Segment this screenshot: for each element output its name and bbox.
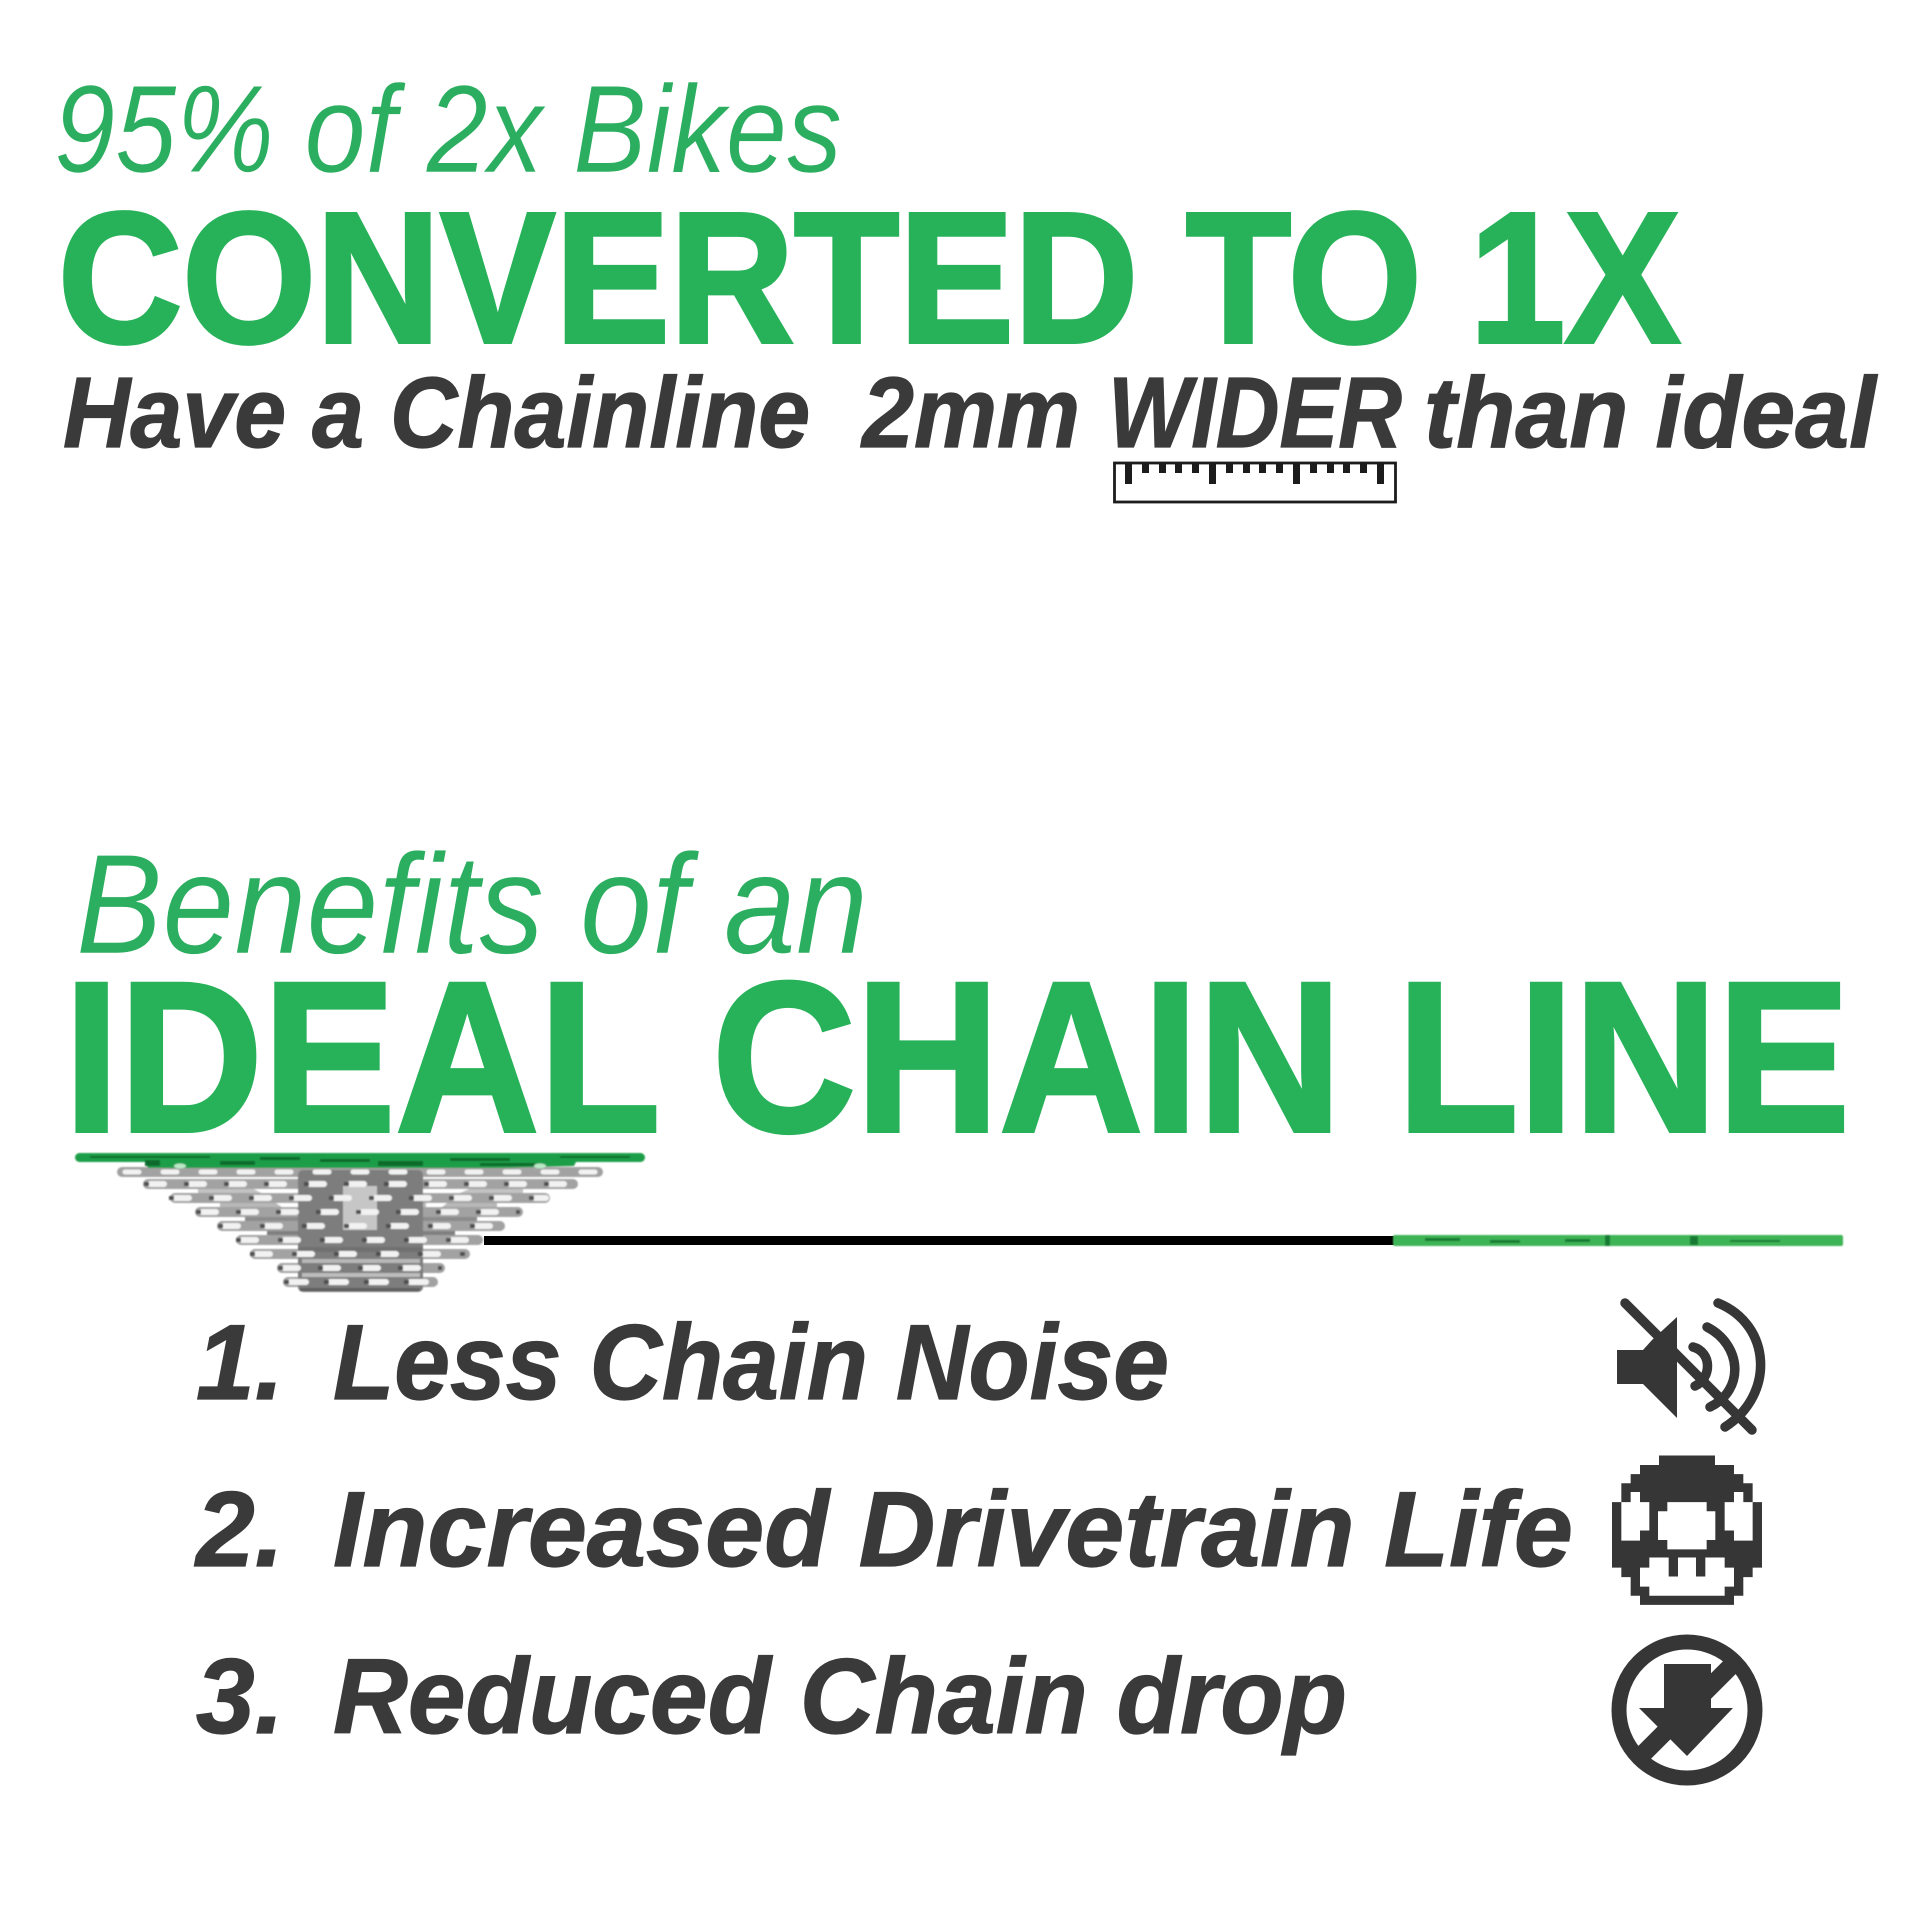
sprocket rows bbox=[117, 1167, 603, 1287]
green top sprocket bbox=[75, 1153, 645, 1168]
icon: muted speaker bbox=[1617, 1303, 1761, 1430]
dark link shadows bbox=[144, 1184, 575, 1282]
subheading: chainline statement: than ideal bbox=[1424, 357, 1878, 469]
cassette bbox=[75, 1153, 645, 1292]
illustration: cassette and chain line bbox=[75, 1153, 1843, 1292]
green chain section bbox=[1393, 1235, 1843, 1246]
list item 2: Increased Drivetrain Life: 2. bbox=[194, 1469, 284, 1589]
subheading: chainline statement: WIDER bbox=[1108, 357, 1402, 469]
heading: Benefits of an: Benefits of an bbox=[76, 825, 868, 984]
icon: no chain drop bbox=[1619, 1642, 1755, 1778]
icon: pixel mushroom bbox=[1612, 1456, 1762, 1605]
cassette core bbox=[298, 1170, 423, 1292]
icon: ruler under WIDER bbox=[1114, 463, 1396, 502]
black chain line bbox=[484, 1236, 1394, 1245]
list item 2: Increased Drivetrain Life: Increased Drivetrain Life bbox=[333, 1469, 1573, 1589]
list item 1: Less Chain Noise: Less Chain Noise bbox=[333, 1302, 1169, 1422]
list item 3: Reduced Chain drop: 3. bbox=[196, 1636, 284, 1756]
subheading: chainline statement bbox=[63, 357, 1878, 469]
list item 3: Reduced Chain drop: Reduced Chain drop bbox=[333, 1636, 1347, 1756]
list item 1: Less Chain Noise: 1. bbox=[196, 1302, 284, 1422]
chain-link highlights bbox=[125, 1172, 600, 1282]
heading: 95% of 2x Bikes: 95% of 2x Bikes bbox=[54, 61, 842, 199]
subheading: chainline statement: Have a Chainline 2mm bbox=[63, 357, 1080, 469]
stepped sprocket bodies bbox=[198, 1186, 523, 1242]
heading: CONVERTED TO 1X: CONVERTED TO 1X bbox=[58, 175, 1680, 382]
